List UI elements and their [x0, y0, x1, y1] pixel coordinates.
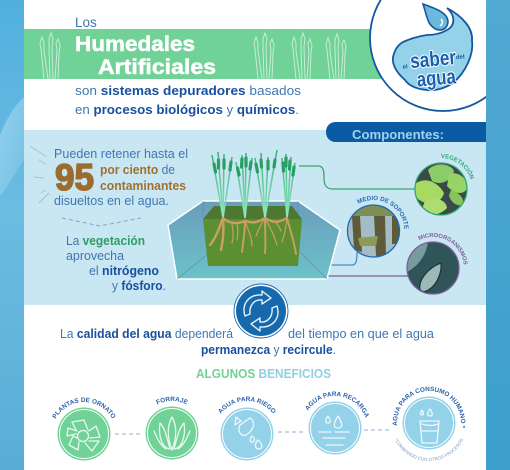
label: MEDIO DE SOPORTE — [356, 196, 409, 230]
logo: el saber del agua: saber — [409, 46, 457, 73]
benefit: recharge water: AGUA PARA RECARGA — [306, 392, 369, 418]
text: water quality — [60, 327, 434, 357]
logo: el saber del agua: del — [456, 54, 465, 61]
text: retention: disueltos en el agua. — [54, 194, 169, 208]
label: MICROORGANISMOS — [418, 233, 468, 264]
logo: el saber del agua — [369, 0, 486, 112]
intro text — [75, 84, 301, 117]
benefit: human consumption water: AGUA PARA CONSUMO HUMANO * — [392, 386, 466, 428]
benefit: human consumption water — [392, 386, 466, 461]
title: Humedales — [75, 33, 195, 56]
components header: Componentes: — [352, 127, 444, 142]
logo: el saber del agua: agua — [416, 65, 457, 92]
benefit: forage — [146, 396, 198, 460]
components header — [326, 122, 486, 142]
text: vegetation: La vegetación — [66, 234, 145, 248]
reed decorations — [40, 33, 346, 80]
benefit: forage: FORRAJE — [156, 396, 188, 404]
benefit: human consumption water: *COMBINADO CON OTROS PROCESOS — [396, 438, 463, 461]
text: water quality: La calidad del agua dependerá — [60, 327, 233, 341]
photo: microorganisms — [406, 233, 468, 295]
roots — [210, 218, 296, 254]
title — [75, 15, 216, 79]
burst strokes — [30, 146, 49, 203]
photo: support medium — [346, 196, 409, 258]
text: vegetation: y fósforo. — [112, 279, 166, 293]
title: Los — [75, 15, 97, 30]
wetland tank diagram — [168, 150, 340, 279]
text: retention: 95 — [55, 157, 94, 198]
connector lines — [261, 166, 416, 276]
text: retention — [54, 147, 188, 208]
benefit: irrigation water: AGUA PARA RIEGO — [218, 396, 276, 414]
text: retention: por ciento de — [100, 163, 175, 177]
text: retention: contaminantes — [100, 179, 186, 193]
title band — [24, 29, 386, 80]
icon: recirculation — [234, 284, 288, 338]
gravel block — [203, 206, 302, 219]
left side band — [0, 0, 24, 470]
text: retention: Pueden retener hasta el — [54, 147, 188, 161]
intro text: en procesos biológicos y químicos . — [75, 103, 299, 117]
text: vegetation — [66, 234, 166, 293]
label: VEGETACIÓN — [441, 154, 474, 180]
photo: vegetation — [414, 154, 474, 216]
heading: benefits: ALGUNOS BENEFICIOS — [196, 367, 331, 381]
benefit: recharge water — [306, 392, 369, 454]
intro text: son sistemas depuradores basados — [75, 84, 301, 98]
reed stems — [212, 150, 295, 218]
benefit: irrigation water — [218, 396, 276, 460]
logo: el saber del agua: el — [402, 64, 408, 71]
text: water quality: del tiempo en que el agua — [288, 327, 434, 341]
right side band — [486, 0, 510, 470]
text: vegetation: el nitrógeno — [89, 264, 159, 278]
text: vegetation: aprovecha — [66, 249, 124, 263]
benefit: ornamental plants: PLANTAS DE ORNATO — [52, 398, 116, 419]
benefit: ornamental plants — [52, 398, 116, 460]
text: water quality: permanezca y recircule. — [201, 343, 336, 357]
panel: components — [24, 122, 486, 305]
title: Artificiales — [98, 56, 216, 79]
benefit connectors — [115, 430, 390, 434]
